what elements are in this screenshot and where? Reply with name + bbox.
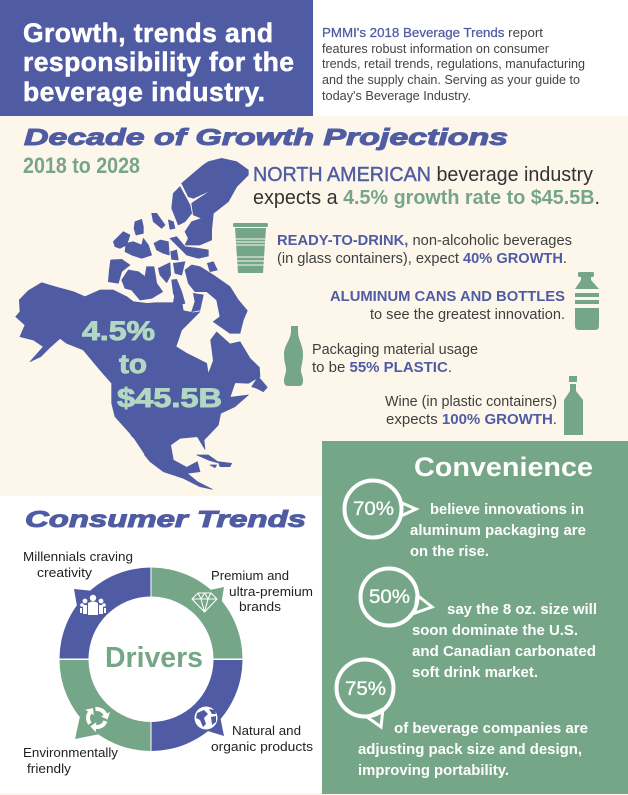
label: natural	[211, 723, 314, 754]
callout: 75%	[336, 660, 394, 727]
label: environmentally friendly	[23, 745, 118, 776]
heading: consumer trends: Consumer Trends	[25, 506, 306, 532]
text: 70%: believe innovations in	[430, 502, 584, 518]
text: 50%: and Canadian carbonated	[412, 644, 596, 660]
label: premium: brands	[239, 599, 282, 614]
heading: convenience: Convenience	[414, 452, 593, 482]
text: 50%	[412, 602, 597, 681]
text: 50%: say the 8 oz. size will	[447, 602, 597, 618]
label: natural: Natural and	[232, 723, 301, 738]
icon: recycle	[85, 706, 110, 732]
intro text	[322, 26, 585, 103]
callout: 50%	[360, 568, 432, 626]
label: millennials: creativity	[37, 565, 93, 580]
map callout: $45.5B	[117, 383, 222, 413]
map: north america	[16, 158, 267, 489]
intro text: and the supply chain. Serving as your guide to	[322, 73, 580, 87]
text: 70%: aluminum packaging are	[410, 523, 586, 539]
title: beverage industry.	[23, 77, 265, 107]
map callout: to	[119, 349, 147, 379]
text: 50%: soon dominate the U.S.	[412, 623, 578, 639]
intro text: features robust information on consumer	[322, 42, 549, 56]
label: millennials: Millennials craving	[23, 549, 133, 564]
text: 75%	[358, 721, 588, 779]
map callout: 4.5%	[82, 316, 155, 346]
callout: 75%: 75%	[345, 679, 386, 700]
callout: 50%: 50%	[369, 587, 410, 608]
panel: decade of growth	[0, 116, 628, 496]
text: packaging: Packaging material usage	[312, 342, 478, 358]
text: 50%: soft drink market.	[412, 665, 538, 681]
label: premium	[211, 568, 313, 614]
text: 75%: improving portability.	[358, 763, 509, 779]
text: ready to drink: (in glass containers), expect 40% GROWTH.	[277, 251, 567, 267]
text: wine: expects 100% GROWTH .	[386, 412, 557, 428]
icon: diamond	[192, 593, 217, 612]
title: responsibility for the	[23, 47, 294, 77]
label: environmentally friendly: friendly	[27, 761, 72, 776]
text: aluminum cans: ALUMINUM CANS AND BOTTLES	[330, 289, 565, 305]
chart centre label: Drivers	[105, 642, 203, 674]
north american growth statement	[253, 164, 600, 209]
intro text: PMMI's 2018 Beverage Trends report	[322, 26, 544, 40]
label: premium: Premium and	[211, 568, 289, 583]
label: environmentally friendly: Environmentally	[23, 745, 118, 760]
panel: header	[0, 0, 585, 116]
text: 70%: on the rise.	[410, 544, 489, 560]
text: wine	[385, 394, 557, 428]
icon: cup	[233, 223, 268, 273]
icon: soda bottle	[284, 326, 303, 386]
donut chart: drivers	[60, 568, 242, 751]
text: ready to drink	[277, 233, 572, 267]
heading: decade of growth: Decade of Growth Projections	[24, 124, 508, 150]
label: millennials	[23, 549, 133, 580]
callout: 70%: 70%	[353, 499, 394, 520]
bottom strip	[0, 793, 628, 795]
title	[23, 18, 294, 107]
text: packaging	[312, 342, 478, 376]
text: packaging: to be 55% PLASTIC.	[312, 360, 452, 376]
intro text: trends, retail trends, regulations, manufacturing	[322, 57, 585, 71]
title: Growth, trends and	[23, 18, 273, 48]
text: 75%: adjusting pack size and design,	[358, 742, 582, 758]
panel: consumer trends	[23, 506, 314, 776]
text: 75%: of beverage companies are	[394, 721, 588, 737]
intro text: today's Beverage Industry.	[322, 89, 471, 103]
map callout	[82, 316, 222, 413]
text: ready to drink: READY-TO-DRINK, non-alcoholic beverages	[277, 233, 572, 249]
north american growth statement: expects a 4.5% growth rate to $45.5B.	[253, 187, 600, 209]
label: premium: ultra-premium	[229, 584, 313, 599]
text: aluminum cans: to see the greatest innovation.	[370, 307, 565, 323]
icon: wine bottle	[564, 376, 583, 435]
text: 70%	[410, 502, 586, 560]
text: wine: Wine (in plastic containers)	[385, 394, 557, 410]
subheading: years: 2018 to 2028	[23, 153, 140, 178]
icon: people	[80, 595, 106, 615]
icon: aluminum bottle	[575, 272, 599, 330]
icon: globe	[194, 706, 218, 730]
callout: 70%	[344, 480, 416, 538]
text: aluminum cans	[330, 289, 565, 323]
north american growth statement: NORTH AMERICAN beverage industry	[253, 164, 593, 186]
label: natural: organic products	[211, 739, 314, 754]
panel: convenience	[322, 441, 628, 794]
